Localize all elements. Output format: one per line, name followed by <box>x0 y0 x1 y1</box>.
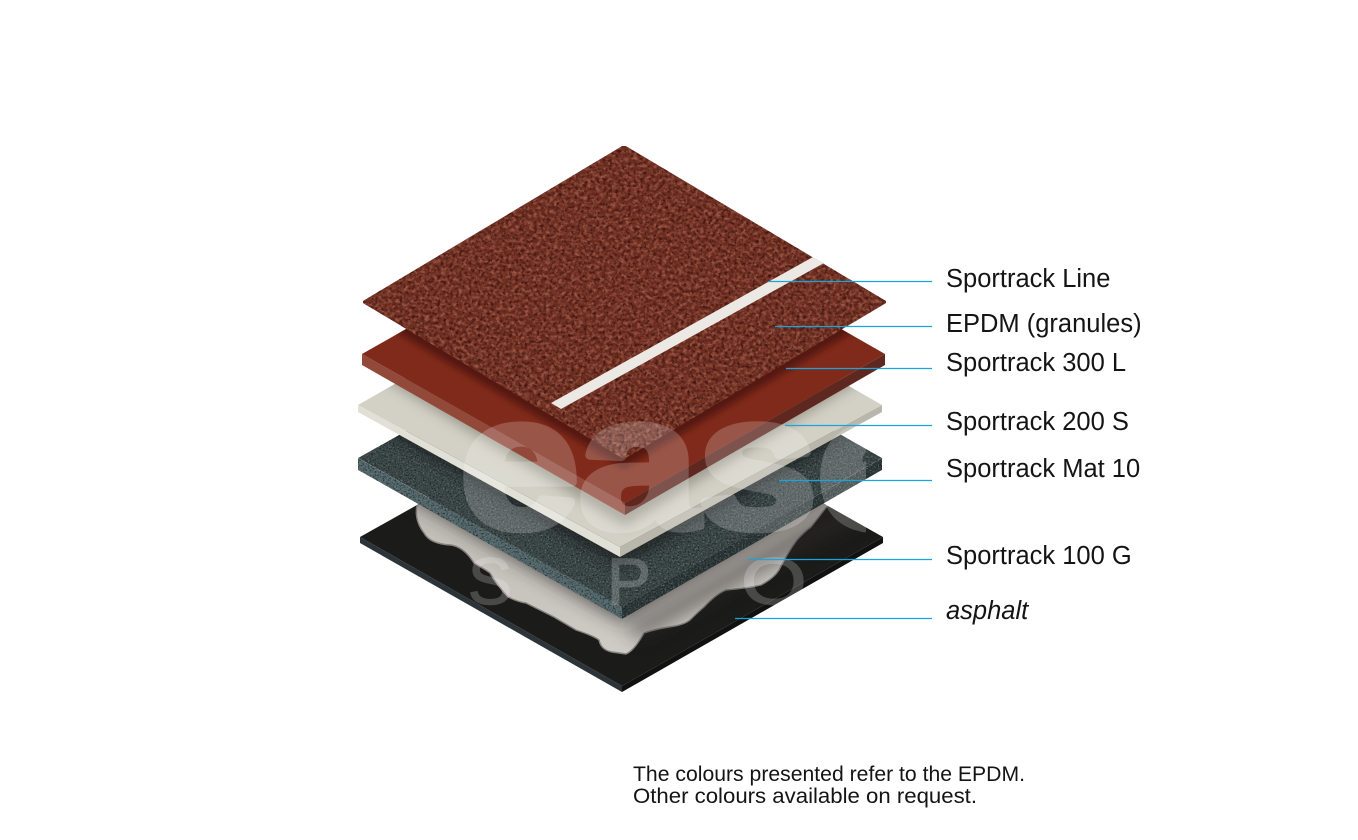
infographic: layered track cross-section <box>358 146 1140 808</box>
label: Sportrack Mat 10: Sportrack Mat 10 <box>946 455 1140 483</box>
watermark: O <box>741 545 807 619</box>
footnote <box>633 763 1025 808</box>
layer: Sportrack 100 G adhesive <box>414 498 858 655</box>
label: EPDM (granules): EPDM (granules) <box>946 310 1142 338</box>
footnote: The colours presented refer to the EPDM. <box>633 763 1025 786</box>
watermark: ease <box>460 357 936 567</box>
watermark: SP <box>468 544 651 618</box>
layer: EPDM granules <box>363 146 886 458</box>
footnote: Other colours available on request. <box>633 785 977 808</box>
layer: Sportrack Mat 10 <box>358 430 882 619</box>
layer: Sportrack 200 S <box>358 378 882 557</box>
label: Sportrack 200 S: Sportrack 200 S <box>946 408 1129 436</box>
label: Sportrack 300 L: Sportrack 300 L <box>946 349 1126 377</box>
layer: asphalt <box>360 390 883 692</box>
layer: Sportrack Line white stripe <box>551 257 824 409</box>
label: Sportrack Line: Sportrack Line <box>946 265 1110 293</box>
label: asphalt: asphalt <box>946 597 1029 625</box>
layer: Sportrack 300 L <box>362 328 885 515</box>
watermark <box>463 421 866 606</box>
label: Sportrack 100 G: Sportrack 100 G <box>946 542 1132 570</box>
